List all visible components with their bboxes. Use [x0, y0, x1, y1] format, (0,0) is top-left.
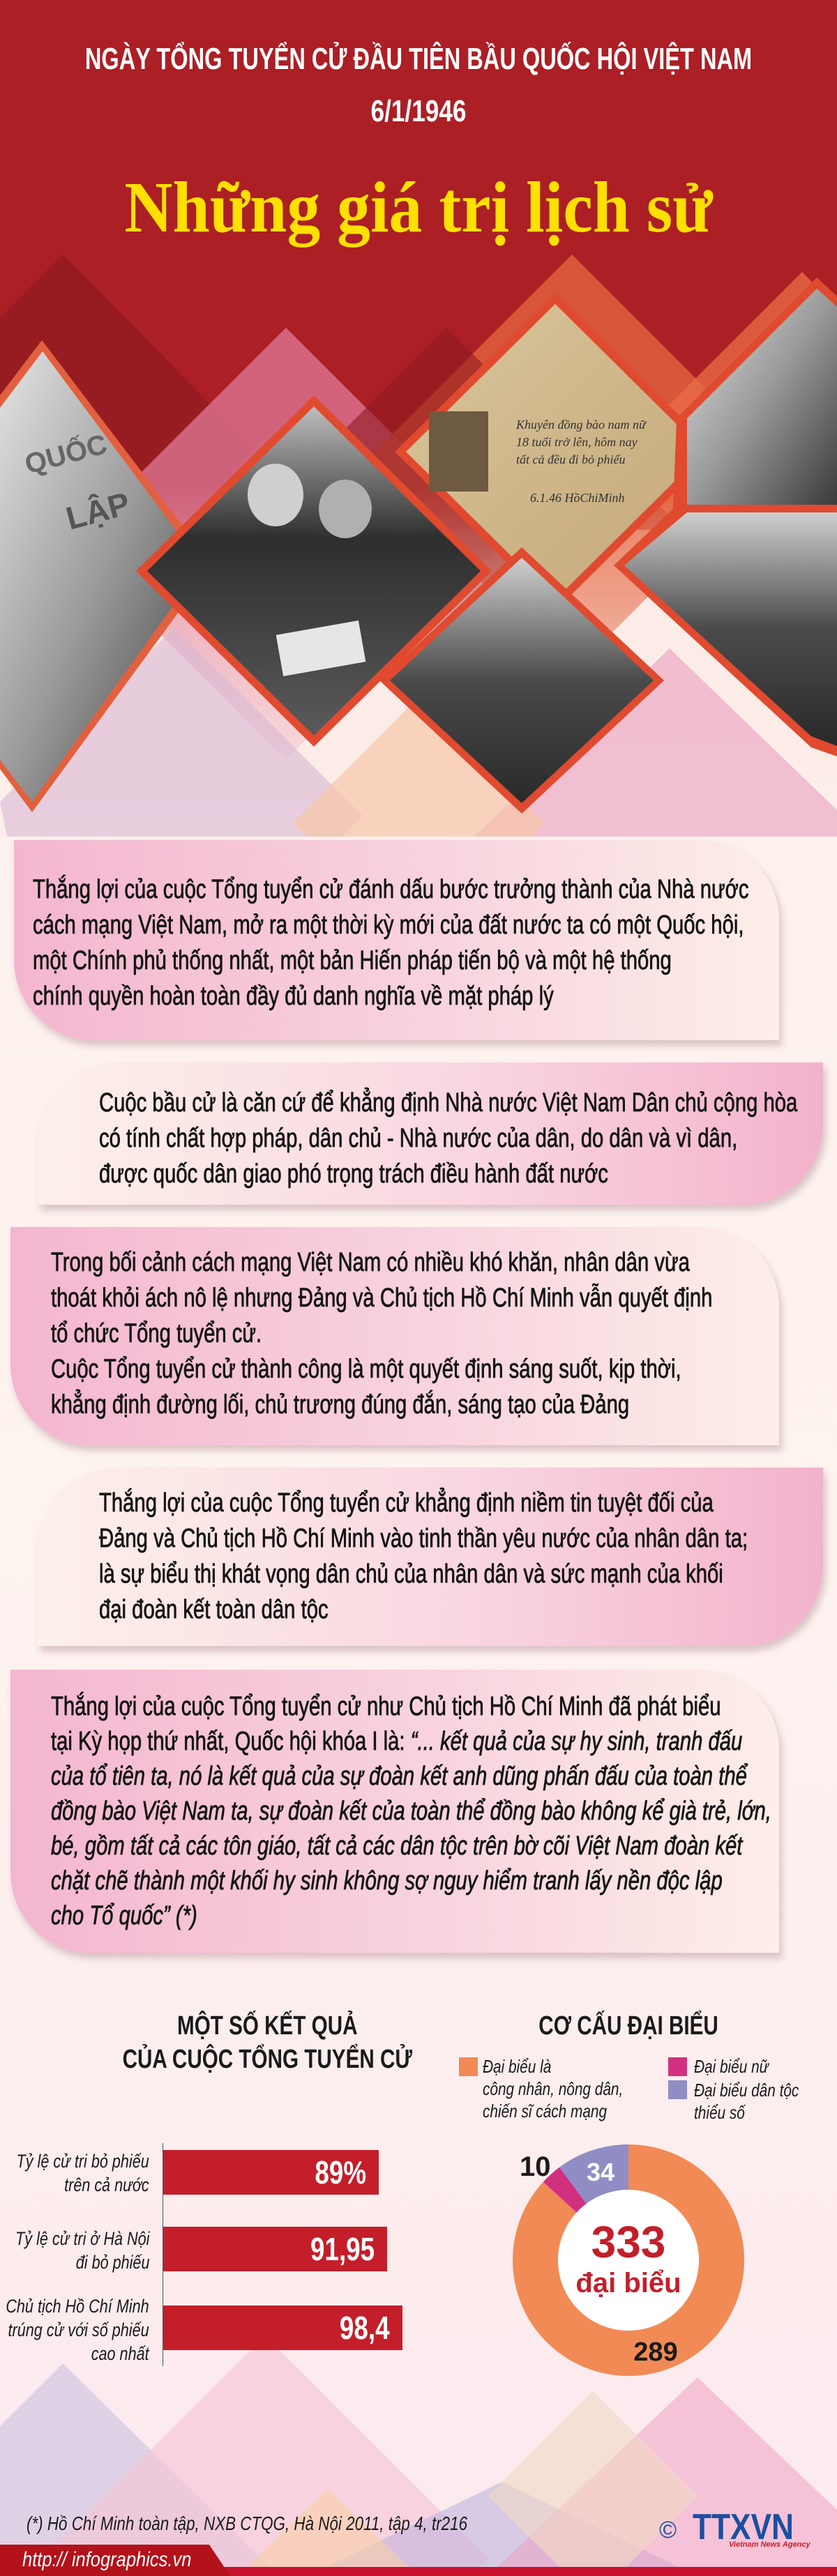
photo: left banner: QUỐC [21, 427, 110, 480]
label 10: 10 [520, 2151, 551, 2182]
logo: TTXVN: Vietnam News Agency [729, 2540, 810, 2549]
heading: election results: MỘT SỐ KẾT QUẢ [177, 2011, 358, 2041]
bar 2: 91,95 [310, 2231, 375, 2267]
bar 2 label [15, 2228, 150, 2273]
legend: ethnic minorities: thiểu số [694, 2102, 745, 2123]
logo: TTXVN: TTXVN [693, 2507, 794, 2547]
bottom background shapes [0, 2350, 837, 2567]
panel 1 text: Thắng lợi của cuộc Tổng tuyển cử đánh dấu bước trưởng thành của Nhà nước [33, 875, 748, 904]
heading: election results [123, 2011, 412, 2074]
panel 5 text: cho Tổ quốc” (*) [51, 1901, 197, 1930]
donut chart: 333 [591, 2217, 665, 2267]
panel 1 [14, 840, 779, 1040]
panel 3 text: khẳng định đường lối, chủ trương đúng đắn, sáng tạo của Đảng [51, 1390, 629, 1419]
panel 3 [10, 1227, 779, 1445]
header background [0, 0, 837, 837]
footnote: (*) Hồ Chí Minh toàn tập, NXB CTQG, Hà Nội 2011, tập 4, tr216 [27, 2513, 467, 2534]
photo: Ho Chi Minh document: Khuyên đồng bào nam nữ [515, 418, 647, 432]
bar 2 label: Tỷ lệ cử tri ở Hà Nội [15, 2228, 149, 2249]
legend: ethnic minorities [668, 2080, 799, 2123]
panel 1 text [33, 874, 749, 1011]
logo: TTXVN: © [659, 2517, 677, 2543]
legend: women: Đại biểu nữ [694, 2056, 769, 2077]
legend [459, 2056, 799, 2123]
bar 3 [163, 2306, 402, 2350]
legend: ethnic minorities: Đại biểu dân tộc [694, 2080, 799, 2101]
panel 1 text: cách mạng Việt Nam, mở ra một thời kỳ mới của đất nước ta có một Quốc hội, [33, 910, 744, 940]
main title: Những giá trị lịch sử [124, 167, 713, 247]
panel 4 text: Đảng và Chủ tịch Hồ Chí Minh vào tinh thần yêu nước của nhân dân ta; [99, 1524, 748, 1553]
legend: workers: công nhân, nông dân, [483, 2078, 623, 2099]
panel 2 text: được quốc dân giao phó trọng trách điều hành đất nước [99, 1159, 608, 1189]
header title: NGÀY TỔNG TUYỂN CỬ ĐẦU TIÊN BẦU QUỐC HỘI VIỆT NAM [85, 42, 752, 76]
heading: delegate structure: CƠ CẤU ĐẠI BIỂU [538, 2011, 718, 2041]
bar chart [6, 2143, 402, 2366]
photo: right street scenes [614, 277, 837, 756]
panel 4 [38, 1468, 823, 1646]
panel 5 [10, 1670, 779, 1953]
panel 5 text: đồng bào Việt Nam ta, sự đoàn kết của toàn thể đồng bào không kể già trẻ, lớn, [51, 1797, 771, 1826]
bar 2 label: đi bỏ phiếu [75, 2252, 149, 2273]
donut chart: đại biểu [575, 2268, 681, 2299]
photo: Ho Chi Minh document: 6.1.46 HồChiMinh [530, 491, 625, 505]
panel 5 text: bé, gồm tất cả các tôn giáo, tất cả các dân tộc trên bờ cõi Việt Nam đoàn kết [51, 1831, 742, 1861]
bar 1 [163, 2150, 379, 2195]
photo: women voting [136, 395, 492, 747]
bar 3 label: Chủ tịch Hồ Chí Minh [6, 2296, 149, 2317]
bar 3 label: cao nhất [91, 2343, 149, 2364]
panel 2 [38, 1062, 823, 1205]
donut chart [513, 2144, 744, 2376]
panel 5 text: chặt chẽ thành một khối hy sinh không sợ nguy hiểm tranh lấy nền độc lập [51, 1866, 723, 1896]
panel 4 text: là sự biểu thị khát vọng dân chủ của nhân dân và sức mạnh của khối [99, 1560, 723, 1589]
legend: workers [459, 2056, 623, 2121]
header date: 6/1/1946 [370, 94, 467, 128]
photo: Ho Chi Minh document [395, 293, 716, 611]
photo: left banner [0, 340, 213, 812]
panel 3 text [51, 1248, 712, 1419]
panel 2 text: Cuộc bầu cử là căn cứ để khẳng định Nhà nước Việt Nam Dân chủ cộng hòa [99, 1088, 797, 1118]
legend: workers: chiến sĩ cách mạng [483, 2101, 607, 2121]
bar 1 label: Tỷ lệ cử tri bỏ phiếu [17, 2151, 149, 2172]
panel 5 text: của tổ tiên ta, nó là kết quả của sự đoàn kết anh dũng phấn đấu của toàn thể [51, 1762, 747, 1791]
panel 3 text: Cuộc Tổng tuyển cử thành công là một quyết định sáng suốt, kịp thời, [51, 1355, 681, 1384]
panel 3 text: tổ chức Tổng tuyển cử. [51, 1319, 262, 1348]
bar 3 label: trúng cử với số phiếu [8, 2319, 149, 2340]
logo: TTXVN [659, 2507, 810, 2549]
panel 1 text: chính quyền hoàn toàn đầy đủ danh nghĩa về mặt pháp lý [33, 982, 554, 1011]
website url: http:// infographics.vn [22, 2548, 191, 2571]
panel 5 text: Thắng lợi của cuộc Tổng tuyển cử như Chủ tịch Hồ Chí Minh đã phát biểu [51, 1692, 721, 1721]
panel 4 text: đại đoàn kết toàn dân tộc [99, 1595, 329, 1624]
bar 1 label [17, 2151, 149, 2195]
panel 3 text: thoát khỏi ách nô lệ nhưng Đảng và Chủ tịch Hồ Chí Minh vẫn quyết định [51, 1283, 712, 1313]
panel 4 text: Thắng lợi của cuộc Tổng tuyển cử khẳng định niềm tin tuyệt đối của [99, 1488, 714, 1518]
panel 4 text [99, 1488, 748, 1624]
bar 2 [163, 2227, 387, 2271]
panel 5 text [51, 1691, 771, 1930]
donut chart: 34 [587, 2158, 614, 2186]
panel 1 text: một Chính phủ thống nhất, một bản Hiến pháp tiến bộ và một hệ thống [33, 946, 672, 975]
panel 5 text: tại Kỳ họp thứ nhất, Quốc hội khóa I là: “... kết quả của sự hy sinh, tranh đấu [51, 1727, 742, 1756]
donut chart: 289 [633, 2338, 678, 2367]
panel 3 text: Trong bối cảnh cách mạng Việt Nam có nhiều khó khăn, nhân dân vừa [51, 1248, 690, 1277]
photo: crowd bottom [379, 547, 664, 814]
panel 2 text: có tính chất hợp pháp, dân chủ - Nhà nước của dân, do dân và vì dân, [99, 1124, 737, 1153]
photo: left banner: LẬP [62, 485, 133, 537]
bar 1: 89% [315, 2154, 366, 2190]
photo: Ho Chi Minh document: tất cả đều đi bỏ phiếu [516, 452, 625, 466]
footer bar [0, 2545, 837, 2576]
bar 3 label [6, 2296, 149, 2364]
legend: workers: Đại biểu là [483, 2056, 551, 2077]
panel 2 text [99, 1088, 798, 1189]
photo: Ho Chi Minh document: 18 tuổi trở lên, hôm nay [516, 435, 638, 449]
bar 3: 98,4 [340, 2310, 390, 2346]
bar 1 label: trên cả nước [64, 2174, 149, 2195]
heading: election results: CỦA CUỘC TỔNG TUYỂN CỬ [123, 2045, 412, 2074]
